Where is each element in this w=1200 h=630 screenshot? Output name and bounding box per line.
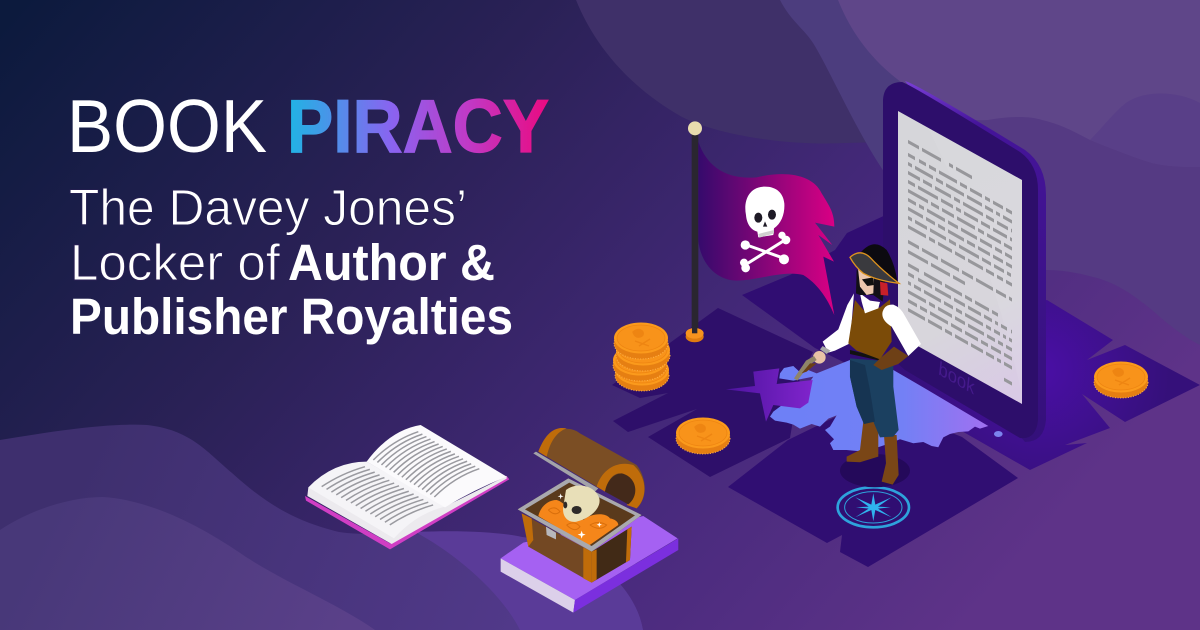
- right page text: [373, 432, 479, 497]
- subtitle line 2: Locker of: [70, 234, 281, 291]
- e-reader screen: [898, 111, 1022, 404]
- subtitle line 3: Publisher Royalties: [70, 288, 513, 345]
- coin stack: [613, 322, 670, 391]
- map puddle: [770, 360, 1003, 452]
- flag pole: [692, 133, 698, 333]
- arrow star: [726, 368, 813, 422]
- chest rim: [518, 478, 642, 552]
- book cover: [305, 476, 509, 549]
- subtitle line 2: Author &: [288, 234, 495, 291]
- pirate vest: [848, 299, 892, 359]
- e-reader body: [883, 82, 1038, 438]
- chest gold: [538, 500, 618, 546]
- skull: [563, 485, 600, 522]
- chest lock: [546, 527, 556, 539]
- pirate collar: [860, 293, 880, 313]
- chest right face: [592, 527, 632, 583]
- flag cloth: [698, 142, 834, 315]
- title: [67, 84, 549, 168]
- flag pole ball: [688, 121, 702, 135]
- book left page: [308, 462, 445, 538]
- pirate hand and pistol: [794, 346, 831, 381]
- pirate head: [856, 268, 888, 302]
- treasure chest: [518, 428, 645, 583]
- screen glare: [928, 128, 1022, 395]
- treasure book side: [573, 538, 678, 613]
- pirate: [794, 244, 921, 487]
- book right page: [367, 425, 507, 507]
- e-reader logo: book: [938, 358, 976, 400]
- pirate trousers: [850, 358, 899, 437]
- screen text: [908, 142, 1012, 384]
- pirate left sleeve: [823, 293, 854, 353]
- subtitle line 1: The Davey Jones’: [69, 179, 467, 236]
- coin: floor: [676, 418, 730, 454]
- pirate shadow: [840, 454, 910, 487]
- chest interior: [518, 478, 642, 552]
- compass: [838, 487, 909, 527]
- subtitle: [69, 179, 513, 345]
- sparkles: [558, 493, 602, 539]
- title: book: BOOK: [67, 84, 267, 168]
- chest corners: [522, 513, 632, 583]
- pirate hat: [850, 244, 899, 283]
- floor tiles: [612, 213, 1200, 567]
- icon: flag: [686, 121, 834, 342]
- treasure book top: [501, 516, 678, 600]
- e-reader: [883, 81, 1046, 442]
- skull: [745, 187, 784, 238]
- chest left face: [522, 513, 592, 583]
- title: piracy: PIRACY: [287, 84, 549, 168]
- background wave: top right: [576, 0, 1200, 345]
- book page stack: [307, 462, 507, 544]
- treasure book: [501, 516, 678, 613]
- coin: right: [1094, 362, 1148, 398]
- pirate right sleeve: [882, 305, 921, 356]
- flag pole base: [686, 327, 704, 342]
- e-reader side edge: [905, 81, 1046, 442]
- pirate belt: [850, 350, 880, 361]
- treasure book pages: [501, 558, 575, 613]
- pirate boots: [847, 422, 899, 485]
- crossbones: [740, 232, 790, 272]
- open book: [305, 425, 509, 549]
- left page text: [322, 467, 433, 525]
- chest lid: [533, 428, 645, 508]
- background wave: bottom left: [0, 425, 643, 630]
- pirate glove: [873, 347, 908, 370]
